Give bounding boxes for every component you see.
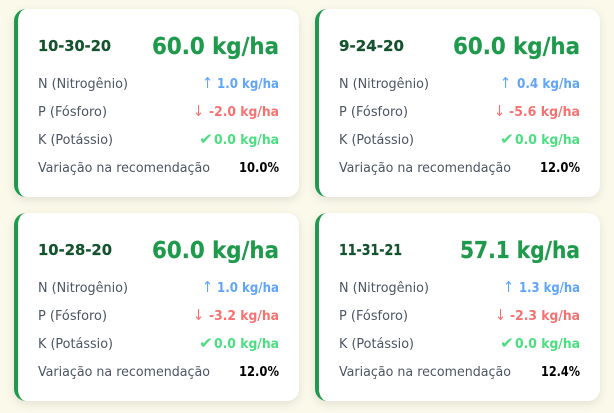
label P: P (Fósforo): [38, 308, 107, 324]
label K: K (Potássio): [339, 132, 414, 148]
value K: ✔: [500, 130, 514, 148]
value variation: 12.0%: [540, 160, 580, 176]
label N: N (Nitrogênio): [339, 76, 429, 92]
label P: P (Fósforo): [339, 308, 408, 324]
value N: ↑: [500, 74, 511, 92]
value P: ↓: [193, 306, 204, 324]
value K: ✔: [199, 334, 213, 352]
value N: ↑: [503, 278, 514, 296]
value P: ↓: [494, 102, 505, 120]
value K: [199, 334, 279, 352]
panel: card 10-30-20: [14, 9, 299, 197]
value K: 0.0 kg/ha: [214, 336, 279, 352]
value variation: 12.0%: [239, 364, 279, 380]
heading: 10-30-20: 10-30-20: [38, 37, 111, 55]
heading: 11-31-21: 11-31-21: [339, 241, 402, 259]
value variation: 12.4%: [541, 364, 580, 380]
heading: 9-24-20: 9-24-20: [339, 37, 404, 55]
value K: 0.0 kg/ha: [515, 336, 580, 352]
amount: 57.1 kg/ha: [460, 236, 580, 264]
value N: [202, 74, 279, 92]
value N: ↑: [202, 278, 213, 296]
label P: P (Fósforo): [339, 104, 408, 120]
label N: N (Nitrogênio): [38, 280, 128, 296]
label variation: Variação na recomendação: [38, 364, 210, 380]
value N: 1.3 kg/ha: [519, 280, 580, 296]
value variation: 10.0%: [239, 160, 279, 176]
value P: -3.2 kg/ha: [209, 308, 279, 324]
amount: 60.0 kg/ha: [453, 32, 580, 60]
amount: 60.0 kg/ha: [152, 236, 279, 264]
value P: ↓: [193, 102, 204, 120]
label P: P (Fósforo): [38, 104, 107, 120]
value K: 0.0 kg/ha: [515, 132, 580, 148]
value K: [199, 130, 279, 148]
label K: K (Potássio): [339, 336, 414, 352]
panel: card 9-24-20: [315, 9, 600, 197]
value N: [500, 74, 580, 92]
label K: K (Potássio): [38, 132, 113, 148]
amount: 60.0 kg/ha: [152, 32, 279, 60]
panel: card 10-28-20: [14, 213, 299, 401]
value N: ↑: [202, 74, 213, 92]
value K: ✔: [500, 334, 514, 352]
label variation: Variação na recomendação: [339, 160, 511, 176]
value P: -5.6 kg/ha: [509, 104, 580, 120]
value N: [503, 278, 580, 296]
label variation: Variação na recomendação: [339, 364, 511, 380]
value P: -2.0 kg/ha: [209, 104, 279, 120]
label K: K (Potássio): [38, 336, 113, 352]
value K: 0.0 kg/ha: [214, 132, 279, 148]
label N: N (Nitrogênio): [339, 280, 429, 296]
value K: [500, 130, 580, 148]
heading: 10-28-20: 10-28-20: [38, 241, 112, 259]
value P: ↓: [495, 306, 506, 324]
value N: 1.0 kg/ha: [217, 76, 279, 92]
value K: [500, 334, 580, 352]
label N: N (Nitrogênio): [38, 76, 128, 92]
panel: card 11-31-21: [315, 213, 600, 401]
value N: 0.4 kg/ha: [517, 76, 580, 92]
value P: [494, 102, 580, 120]
value N: 1.0 kg/ha: [217, 280, 279, 296]
value P: -2.3 kg/ha: [510, 308, 580, 324]
value P: [495, 306, 580, 324]
label variation: Variação na recomendação: [38, 160, 210, 176]
value N: [202, 278, 279, 296]
value P: [193, 306, 279, 324]
value K: ✔: [199, 130, 213, 148]
value P: [193, 102, 279, 120]
